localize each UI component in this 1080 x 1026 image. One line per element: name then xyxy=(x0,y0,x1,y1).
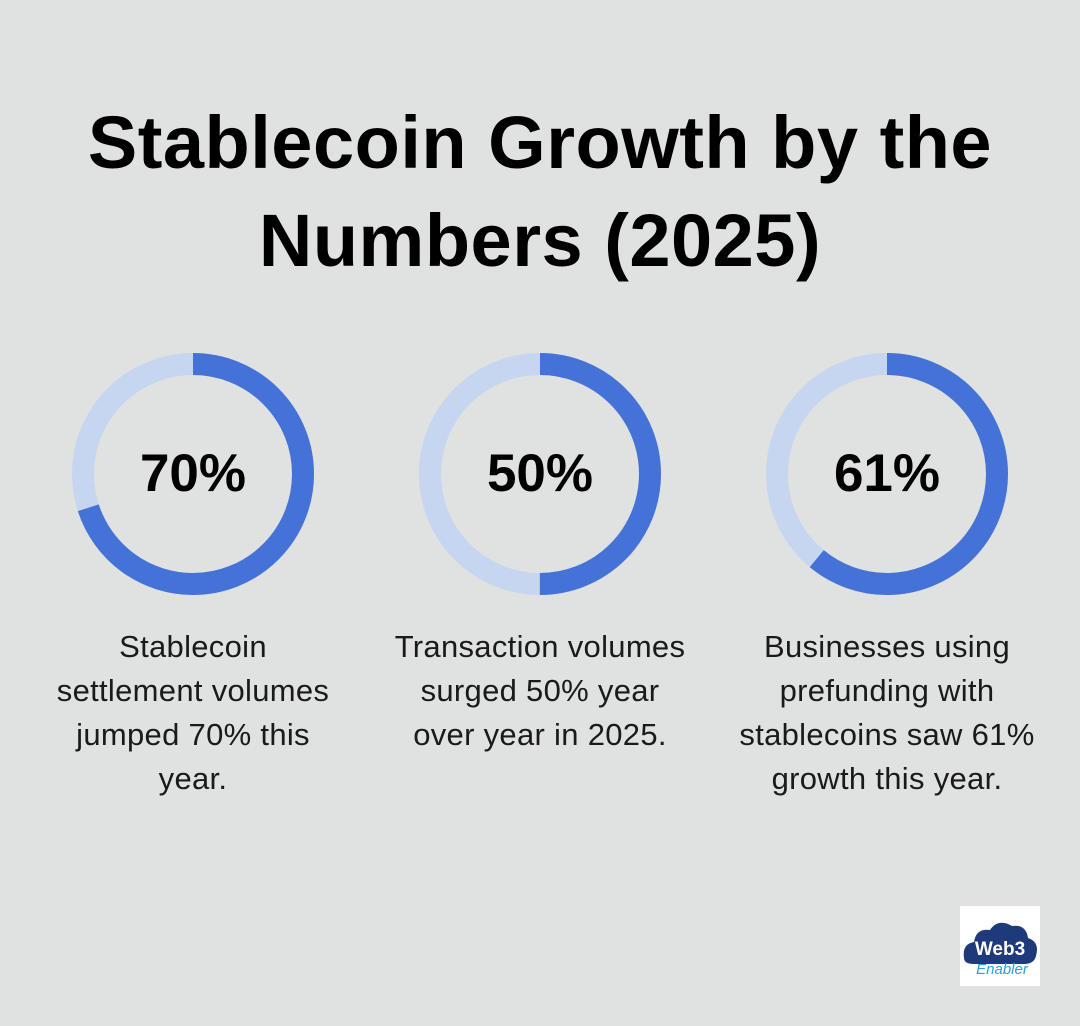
desc: 70%: year. xyxy=(159,761,227,796)
desc: 70% xyxy=(57,629,329,796)
logo xyxy=(960,906,1040,986)
desc: 70%: jumped 70% this xyxy=(76,717,310,752)
desc: 50%: over year in 2025. xyxy=(413,717,667,752)
donut: 70%: 70% xyxy=(140,444,246,503)
desc: 61%: growth this year. xyxy=(772,761,1002,796)
title: Stablecoin Growth by the xyxy=(88,101,992,184)
donut: 61%: 61% xyxy=(834,444,940,503)
desc: 50%: Transaction volumes xyxy=(395,629,685,664)
title xyxy=(88,101,992,282)
donut: 50% xyxy=(419,353,661,595)
desc: 70%: settlement volumes xyxy=(57,673,329,708)
desc: 50% xyxy=(395,629,685,752)
logo: Web3 xyxy=(975,939,1025,960)
title: Numbers (2025) xyxy=(259,199,821,282)
desc: 50%: surged 50% year xyxy=(421,673,659,708)
donut: 50%: 50% xyxy=(487,444,593,503)
logo: Enabler xyxy=(976,961,1029,978)
desc: 61%: Businesses using xyxy=(764,629,1010,664)
donut: 61% xyxy=(766,353,1008,595)
desc: 61%: prefunding with xyxy=(780,673,994,708)
desc: 61% xyxy=(739,629,1035,796)
desc: 70%: Stablecoin xyxy=(119,629,267,664)
donut: 70% xyxy=(72,353,314,595)
desc: 61%: stablecoins saw 61% xyxy=(739,717,1035,752)
